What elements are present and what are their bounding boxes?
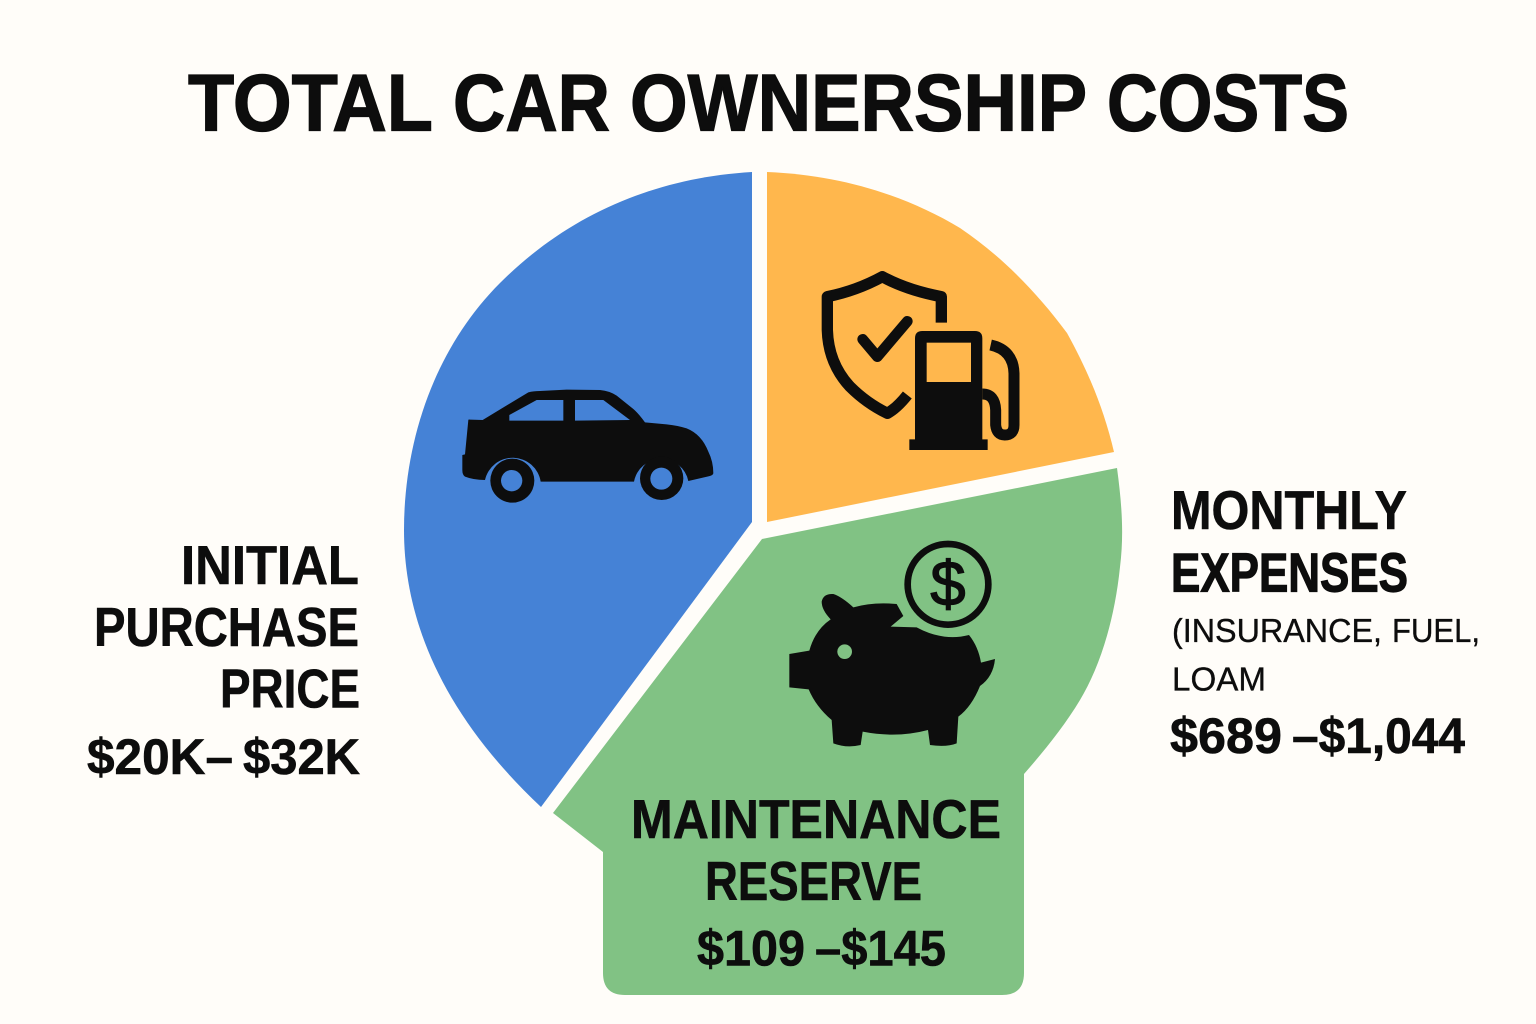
label: maintenance reserve: RESERVE xyxy=(705,850,922,912)
icon: car xyxy=(462,390,713,503)
label: monthly expenses: (INSURANCE, xyxy=(1172,612,1382,649)
orange pie segment xyxy=(767,172,1114,522)
title: COSTS xyxy=(1107,58,1349,148)
label: monthly expenses: MONTHLY xyxy=(1171,479,1407,541)
green pie segment with label tab xyxy=(553,468,1122,995)
label: maintenance reserve: MAINTENANCE xyxy=(631,788,1001,850)
title: OWNERSHIP xyxy=(630,58,1087,148)
label: initial purchase price: PURCHASE xyxy=(94,596,359,658)
label: monthly expenses xyxy=(1170,479,1480,764)
title: CAR xyxy=(453,58,610,148)
blue pie segment xyxy=(404,172,752,807)
label: initial purchase price: $20K– xyxy=(87,729,233,785)
label: monthly expenses: –$1,044 xyxy=(1292,708,1465,764)
label: initial purchase price: PRICE xyxy=(220,658,360,720)
title: TOTAL xyxy=(188,58,433,148)
label: maintenance reserve xyxy=(631,788,1001,976)
label: maintenance reserve: $109 xyxy=(697,920,805,976)
title xyxy=(188,58,1349,148)
label: monthly expenses: $689 xyxy=(1170,708,1282,764)
panel: maintenance reserve segment xyxy=(553,468,1122,995)
panel: initial purchase price segment xyxy=(404,172,752,807)
icon: piggy bank with coin xyxy=(789,544,995,746)
label: monthly expenses: EXPENSES xyxy=(1171,542,1408,604)
label: monthly expenses: FUEL, xyxy=(1392,612,1480,649)
icon: piggy bank with coin: $ xyxy=(930,549,966,619)
label: initial purchase price: $32K xyxy=(243,729,360,785)
label: initial purchase price xyxy=(87,534,360,785)
label: maintenance reserve: –$145 xyxy=(815,920,946,976)
panel: monthly expenses segment xyxy=(767,172,1114,522)
label: initial purchase price: INITIAL xyxy=(181,534,359,596)
label: monthly expenses: LOAM xyxy=(1172,660,1266,698)
icon: shield and fuel pump xyxy=(827,277,1014,450)
